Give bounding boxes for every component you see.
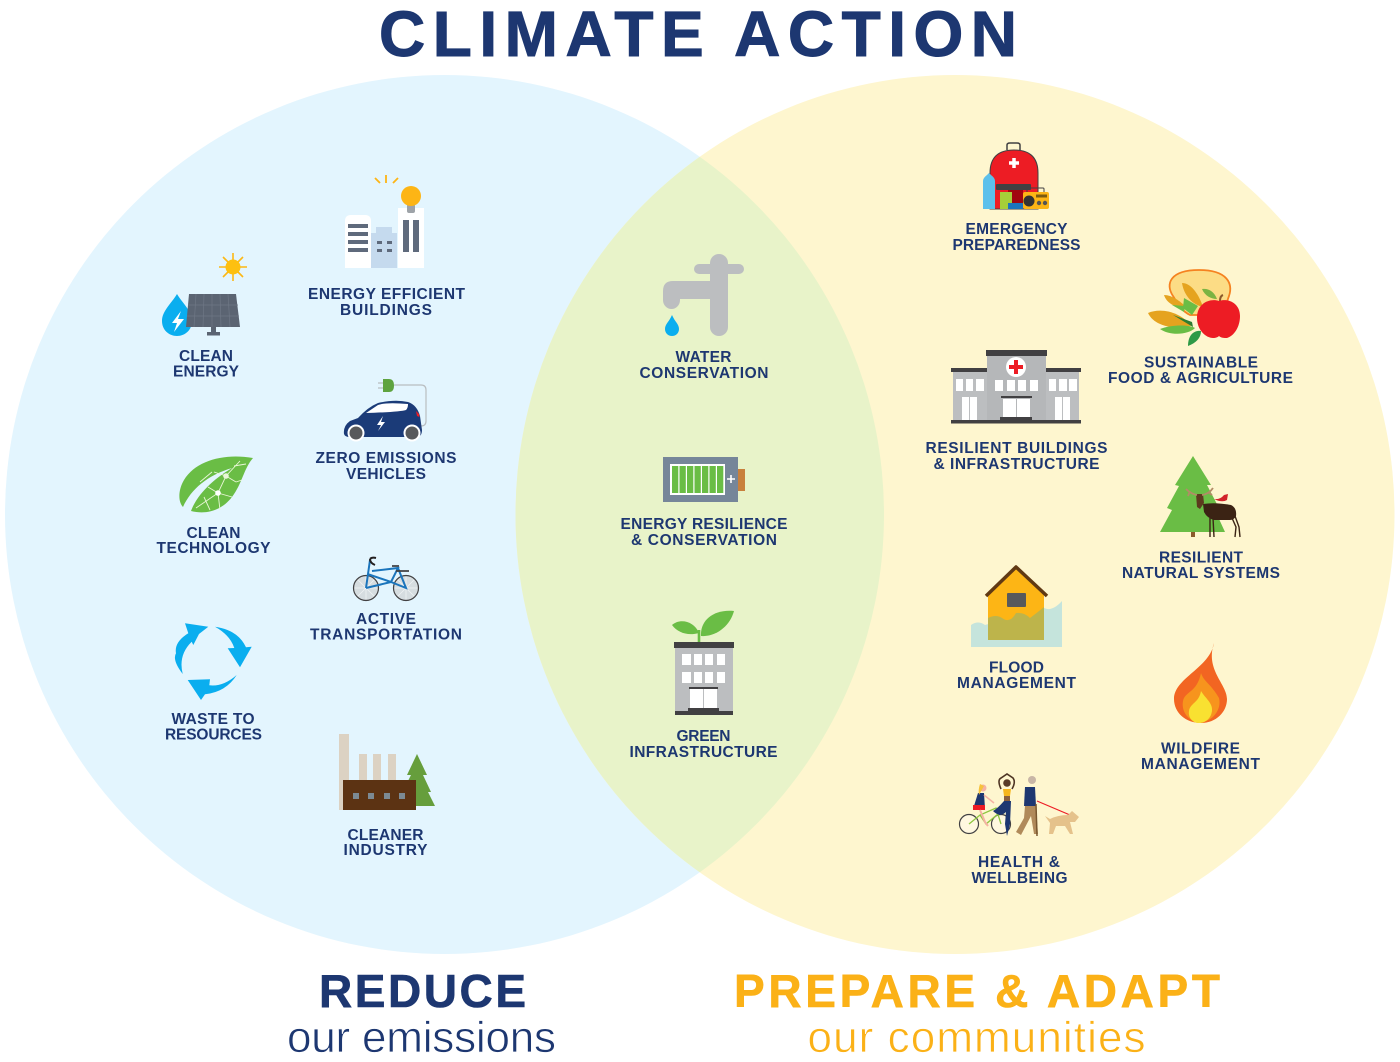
label xyxy=(165,711,262,744)
label xyxy=(952,221,1080,254)
label: TECHNOLOGY xyxy=(156,540,271,557)
item: green infrastructure xyxy=(630,611,778,761)
label: WILDFIRE xyxy=(1161,740,1240,758)
label: MANAGEMENT xyxy=(957,675,1077,692)
label: MANAGEMENT xyxy=(1141,756,1261,773)
label xyxy=(156,525,271,557)
item: zero emissions vehicles xyxy=(316,379,456,483)
item: resilient natural systems xyxy=(1122,456,1280,582)
label: ZERO EMISSIONS xyxy=(316,450,456,467)
label: HEALTH & xyxy=(978,854,1060,871)
subheading: our emissions: our emissions xyxy=(287,1013,556,1062)
label xyxy=(173,348,240,380)
icon: factory and tree xyxy=(339,734,435,810)
label: & CONSERVATION xyxy=(631,532,777,549)
label xyxy=(972,854,1068,887)
label xyxy=(630,728,778,761)
item: resilient buildings and infrastructure xyxy=(926,350,1108,473)
item: wildfire management xyxy=(1141,643,1261,773)
item: clean technology xyxy=(156,456,271,557)
icon: electric car xyxy=(344,379,426,442)
item: waste to resources xyxy=(165,623,262,744)
label xyxy=(620,516,788,549)
circle: prepare and adapt xyxy=(516,75,1394,954)
heading: reduce: REDUCE xyxy=(319,965,526,1017)
icon: solar panel, sun and drop xyxy=(162,253,247,336)
label xyxy=(1141,740,1261,773)
icon: flooded house xyxy=(971,567,1062,647)
item: emergency preparedness xyxy=(952,143,1080,254)
circle: reduce xyxy=(5,75,884,954)
icon: circuit leaf xyxy=(179,456,253,512)
label xyxy=(308,286,466,319)
label: SUSTAINABLE xyxy=(1144,354,1258,372)
item: energy resilience and conservation xyxy=(620,457,788,549)
label: WELLBEING xyxy=(972,870,1068,887)
label: CLEANER xyxy=(348,827,424,844)
label: ACTIVE xyxy=(356,611,416,628)
label: EMERGENCY xyxy=(966,221,1068,238)
label xyxy=(316,450,456,483)
item: clean energy xyxy=(162,253,247,380)
label xyxy=(1122,550,1280,582)
item: sustainable food and agriculture xyxy=(1108,270,1293,387)
label xyxy=(640,349,768,382)
heading: prepare and adapt: PREPARE & ADAPT xyxy=(734,965,1220,1017)
icon: recycling arrows xyxy=(175,623,252,700)
label: WASTE TO xyxy=(172,711,254,728)
title: CLIMATE ACTION xyxy=(379,0,1017,70)
item: cleaner industry xyxy=(339,734,435,859)
label: RESOURCES xyxy=(165,726,262,744)
label: ENERGY EFFICIENT xyxy=(308,286,466,303)
label: TRANSPORTATION xyxy=(310,626,462,644)
label: FOOD & AGRICULTURE xyxy=(1108,370,1293,387)
label xyxy=(344,827,428,859)
icon: emergency backpack xyxy=(983,143,1049,209)
label: INFRASTRUCTURE xyxy=(630,744,778,761)
label xyxy=(926,440,1108,473)
icon: cyclist, yoga figure, walker and dog xyxy=(960,774,1079,836)
label: CLEAN xyxy=(186,525,240,542)
icon: building with sprout xyxy=(672,611,734,715)
label: CLEAN xyxy=(179,348,233,365)
item: water conservation xyxy=(640,254,768,382)
subheading: our communities: our communities xyxy=(808,1013,1146,1062)
label: WATER xyxy=(676,349,732,366)
label: CONSERVATION xyxy=(640,365,768,382)
label: INDUSTRY xyxy=(344,842,428,859)
label: GREEN xyxy=(676,728,730,745)
label: & INFRASTRUCTURE xyxy=(934,456,1100,473)
label: VEHICLES xyxy=(346,466,426,483)
icon: faucet and drop xyxy=(663,254,744,336)
label: NATURAL SYSTEMS xyxy=(1122,565,1280,582)
item: health and wellbeing xyxy=(960,774,1079,887)
overlap region xyxy=(516,157,884,872)
label: PREPAREDNESS xyxy=(952,237,1080,254)
item: flood management xyxy=(957,567,1077,692)
label: RESILIENT BUILDINGS xyxy=(926,440,1108,457)
label xyxy=(957,660,1077,692)
label: FLOOD xyxy=(989,660,1044,676)
label xyxy=(1108,354,1293,387)
icon: buildings and bulb xyxy=(345,175,424,268)
icon: bread, corn and apple xyxy=(1148,270,1240,346)
label: ENERGY xyxy=(173,364,240,380)
icon: bicycle xyxy=(354,558,418,600)
label: RESILIENT xyxy=(1159,550,1244,566)
icon: hospital xyxy=(951,350,1081,424)
icon: flame xyxy=(1174,643,1227,723)
item: energy efficient buildings xyxy=(308,175,466,319)
label: BUILDINGS xyxy=(340,302,432,319)
icon: battery xyxy=(663,457,745,502)
icon: tree, moose and cardinal xyxy=(1160,456,1240,537)
item: active transportation xyxy=(310,558,462,644)
label xyxy=(310,611,462,644)
label: ENERGY RESILIENCE xyxy=(620,516,788,533)
